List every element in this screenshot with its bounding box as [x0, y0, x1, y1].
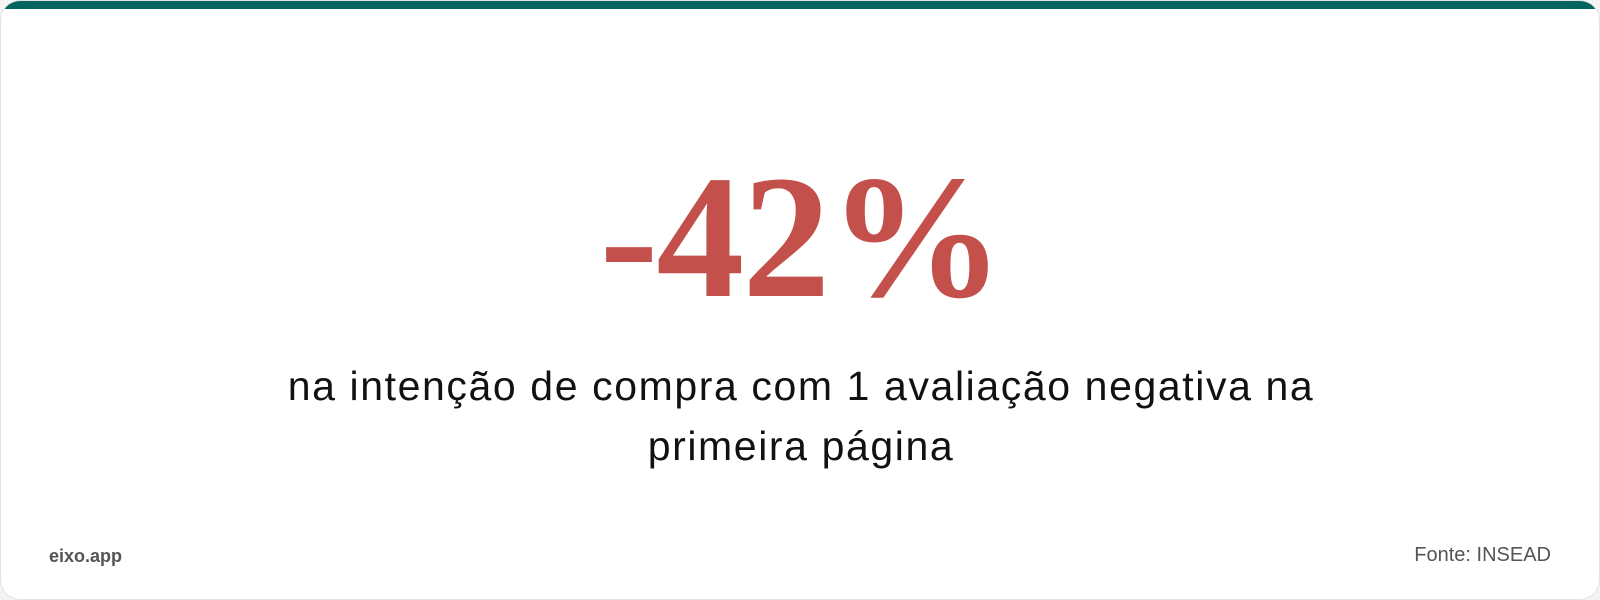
description: na intenção de compra com 1 avaliação negativa na — [288, 363, 1314, 409]
description — [288, 363, 1314, 469]
source: Fonte: INSEAD — [1414, 544, 1551, 566]
big stat: -42% — [600, 140, 1002, 335]
brand: eixo.app — [49, 546, 122, 566]
top accent bar — [1, 1, 1599, 9]
description: primeira página — [648, 423, 954, 469]
